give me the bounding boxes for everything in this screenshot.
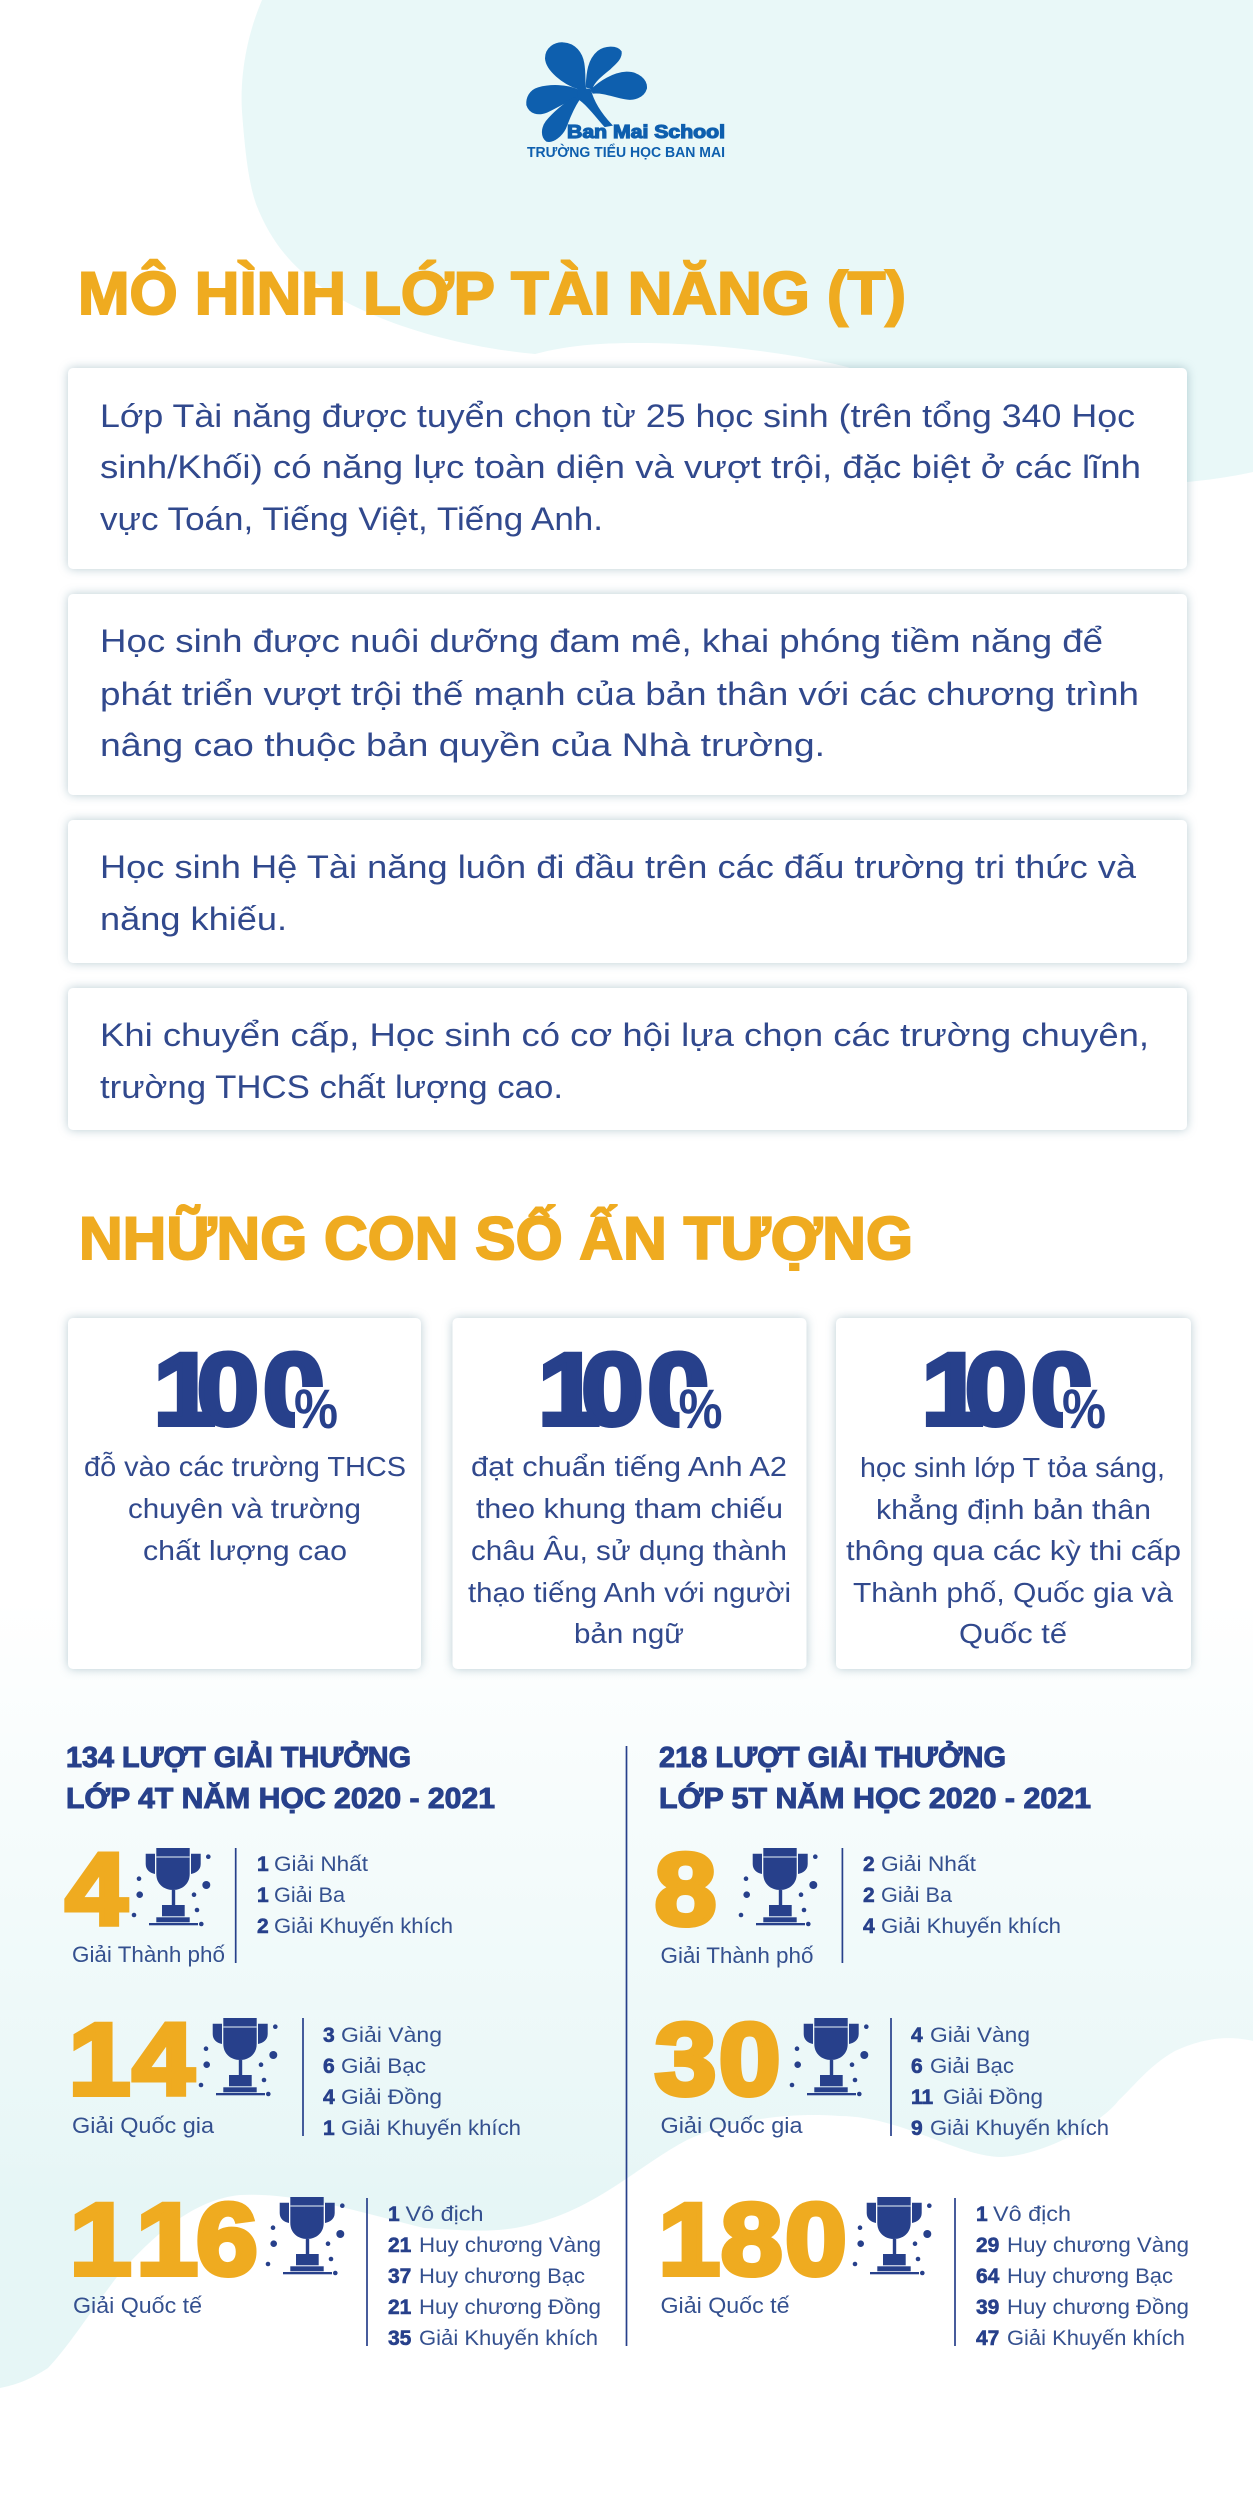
panel: card 1: Lớp Tài năng được tuyển chọn từ 25 học sinh (trên tổng 340 Học xyxy=(100,398,1135,434)
award list: 1 xyxy=(323,2117,335,2140)
panel: stat 3: Quốc tế xyxy=(959,1618,1067,1649)
award list: Giải Khuyến khích xyxy=(274,1915,453,1938)
award list xyxy=(323,2024,521,2140)
award list: Giải Đồng xyxy=(943,2086,1043,2109)
panel: card 3: Học sinh Hệ Tài năng luôn đi đầu trên các đấu trường tri thức và xyxy=(100,849,1136,885)
award list: Giải Khuyến khích xyxy=(930,2117,1109,2140)
icon: trophy xyxy=(790,2018,869,2096)
panel: stat 2: theo khung tham chiếu xyxy=(476,1493,783,1524)
panel: stat 2: đạt chuẩn tiếng Anh A2 xyxy=(471,1451,787,1482)
heading: class 4T awards: 134 LƯỢT GIẢI THƯỞNG xyxy=(66,1740,411,1774)
award list: 39 xyxy=(976,2296,999,2319)
panel: stat 3: học sinh lớp T tỏa sáng, xyxy=(860,1452,1165,1483)
award list: 4 xyxy=(911,2024,923,2047)
stat row: 5T national: Giải Quốc gia xyxy=(660,2113,803,2138)
stat value: 100%: % xyxy=(294,1377,338,1440)
panel: stat 1: chuyên và trường xyxy=(128,1493,361,1524)
stat row: 5T city: 8 xyxy=(655,1832,716,1946)
panel: card 2: Học sinh được nuôi dưỡng đam mê, khai phóng tiềm năng để xyxy=(100,623,1103,659)
panel: card 3 xyxy=(68,820,1187,963)
award list: 2 xyxy=(257,1915,269,1938)
logo subtitle: TRƯỜNG TIỂU HỌC BAN MAI xyxy=(527,143,725,161)
stat row: 4T international xyxy=(70,2182,601,2350)
award list: Giải Ba xyxy=(881,1884,952,1907)
award list: 47 xyxy=(976,2327,999,2350)
heading: class 4T awards: LỚP 4T NĂM HỌC 2020 - 2021 xyxy=(66,1781,495,1815)
heading: impressive numbers: NHỮNG CON SỐ ẤN TƯỢNG xyxy=(79,1205,913,1272)
stat row: 4T city: 4 xyxy=(65,1832,127,1946)
logo name: Ban Mai School xyxy=(567,122,725,142)
award list: Giải Bạc xyxy=(341,2055,426,2078)
panel: stat 3: Thành phố, Quốc gia và xyxy=(853,1577,1173,1608)
icon: trophy xyxy=(266,2197,345,2275)
award list: Huy chương Bạc xyxy=(419,2265,585,2288)
stat row: 4T international: 116 xyxy=(70,2182,258,2296)
award list: 29 xyxy=(976,2234,999,2257)
stat row: 4T city xyxy=(65,1832,453,1967)
award list: 1 xyxy=(976,2203,988,2226)
award list: Huy chương Vàng xyxy=(419,2234,601,2257)
award list: Giải Khuyến khích xyxy=(341,2117,521,2140)
award list xyxy=(863,1853,1061,1938)
award list: Vô địch xyxy=(406,2203,484,2226)
panel: card 4: Khi chuyển cấp, Học sinh có cơ hội lựa chọn các trường chuyên, xyxy=(100,1017,1149,1053)
award list: Giải Vàng xyxy=(341,2024,442,2047)
award list xyxy=(976,2203,1189,2350)
background blob: top xyxy=(242,0,1253,482)
award list: 3 xyxy=(323,2024,335,2047)
stat row: 4T city: Giải Thành phố xyxy=(72,1942,225,1967)
title: model: MÔ HÌNH LỚP TÀI NĂNG (T) xyxy=(78,260,906,327)
panel: card 4 xyxy=(68,988,1187,1130)
stat row: 5T international: 180 xyxy=(658,2182,847,2296)
panel: card 1 xyxy=(68,368,1187,569)
heading: class 5T awards: LỚP 5T NĂM HỌC 2020 - 2021 xyxy=(659,1781,1091,1815)
panel: card 4: trường THCS chất lượng cao. xyxy=(100,1069,563,1105)
panel: card 1: sinh/Khối) có năng lực toàn diện và vượt trội, đặc biệt ở các lĩnh xyxy=(100,449,1141,485)
award list: Giải Bạc xyxy=(930,2055,1014,2078)
award list: 37 xyxy=(388,2265,411,2288)
award list: 9 xyxy=(911,2117,923,2140)
panel: stat 2: thạo tiếng Anh với người xyxy=(468,1577,791,1608)
panel: stat 3: thông qua các kỳ thi cấp xyxy=(846,1535,1181,1566)
panel: card 2: nâng cao thuộc bản quyền của Nhà trường. xyxy=(100,727,825,763)
award list: 35 xyxy=(388,2327,412,2350)
award list: 6 xyxy=(323,2055,335,2078)
award list: 1 xyxy=(257,1884,269,1907)
award list: 21 xyxy=(388,2234,412,2257)
stat value: 100%: 100 xyxy=(922,1332,1093,1446)
award list: Giải Khuyến khích xyxy=(1007,2327,1185,2350)
stat row: 4T national: Giải Quốc gia xyxy=(72,2113,215,2138)
stat row: 5T national: 30 xyxy=(655,2002,781,2116)
award list: Giải Khuyến khích xyxy=(881,1915,1061,1938)
award list xyxy=(388,2203,601,2350)
award list: 4 xyxy=(863,1915,875,1938)
award list: 4 xyxy=(323,2086,335,2109)
award list: 21 xyxy=(388,2296,412,2319)
stat row: 5T international xyxy=(658,2182,1189,2350)
award list: 11 xyxy=(911,2086,934,2109)
icon: flower xyxy=(527,43,646,141)
stat row: 4T national: 14 xyxy=(69,2002,194,2116)
award list xyxy=(911,2024,1109,2140)
stat row: 5T city xyxy=(655,1832,1061,1968)
heading: class 4T awards xyxy=(66,1740,495,1815)
panel: stat 3: khẳng định bản thân xyxy=(876,1493,1151,1525)
panel: stat 2: châu Âu, sử dụng thành xyxy=(471,1535,787,1566)
heading: class 5T awards: 218 LƯỢT GIẢI THƯỞNG xyxy=(659,1740,1006,1774)
stat value: 100%: % xyxy=(678,1377,722,1440)
award list: Giải Đồng xyxy=(341,2086,442,2109)
award list: Huy chương Đồng xyxy=(419,2296,601,2319)
award list: 1 xyxy=(388,2203,400,2226)
stat row: 5T city: Giải Thành phố xyxy=(660,1943,814,1968)
icon: trophy xyxy=(199,2018,278,2096)
stat row: 4T international: Giải Quốc tế xyxy=(73,2293,202,2318)
award list: Huy chương Vàng xyxy=(1007,2234,1189,2257)
award list: Huy chương Bạc xyxy=(1007,2265,1173,2288)
award list: Huy chương Đồng xyxy=(1007,2296,1189,2319)
panel: stat 1: đỗ vào các trường THCS xyxy=(84,1451,406,1482)
award list: 1 xyxy=(257,1853,269,1876)
icon: trophy xyxy=(853,2197,932,2275)
panel: card 3: năng khiếu. xyxy=(100,901,287,937)
award list: 6 xyxy=(911,2055,923,2078)
icon: trophy xyxy=(739,1848,818,1926)
stat row: 4T national xyxy=(69,2002,521,2140)
background blob: bottom xyxy=(0,1600,1253,2388)
award list: Giải Khuyến khích xyxy=(419,2327,598,2350)
stat row: 5T national xyxy=(655,2002,1109,2140)
award list xyxy=(257,1853,453,1938)
award list: 64 xyxy=(976,2265,1000,2288)
award list: Giải Vàng xyxy=(930,2024,1030,2047)
stat value: 100%: % xyxy=(1062,1377,1106,1440)
award list: Giải Nhất xyxy=(274,1853,368,1876)
panel: stat 3 xyxy=(836,1318,1191,1669)
logo: Ban Mai School xyxy=(527,43,725,161)
award list: 2 xyxy=(863,1853,875,1876)
award list: Giải Nhất xyxy=(881,1853,976,1876)
award list: 2 xyxy=(863,1884,875,1907)
stat value: 100%: 100 xyxy=(538,1332,709,1446)
panel: stat 1 xyxy=(68,1318,421,1669)
divider: center line xyxy=(626,1746,628,2346)
stat row: 5T international: Giải Quốc tế xyxy=(660,2293,790,2318)
panel: card 2 xyxy=(68,594,1187,795)
award list: Vô địch xyxy=(993,2203,1071,2226)
icon: trophy xyxy=(132,1848,211,1926)
panel: stat 1: chất lượng cao xyxy=(143,1535,347,1566)
award list: Giải Ba xyxy=(274,1884,345,1907)
stat value: 100%: 100 xyxy=(154,1332,325,1446)
heading: class 5T awards xyxy=(659,1740,1091,1815)
panel: card 2: phát triển vượt trội thế mạnh của bản thân với các chương trình xyxy=(100,676,1139,712)
panel: stat 2 xyxy=(452,1318,806,1669)
panel: stat 2: bản ngữ xyxy=(574,1618,684,1649)
panel: card 1: vực Toán, Tiếng Việt, Tiếng Anh. xyxy=(100,501,603,537)
